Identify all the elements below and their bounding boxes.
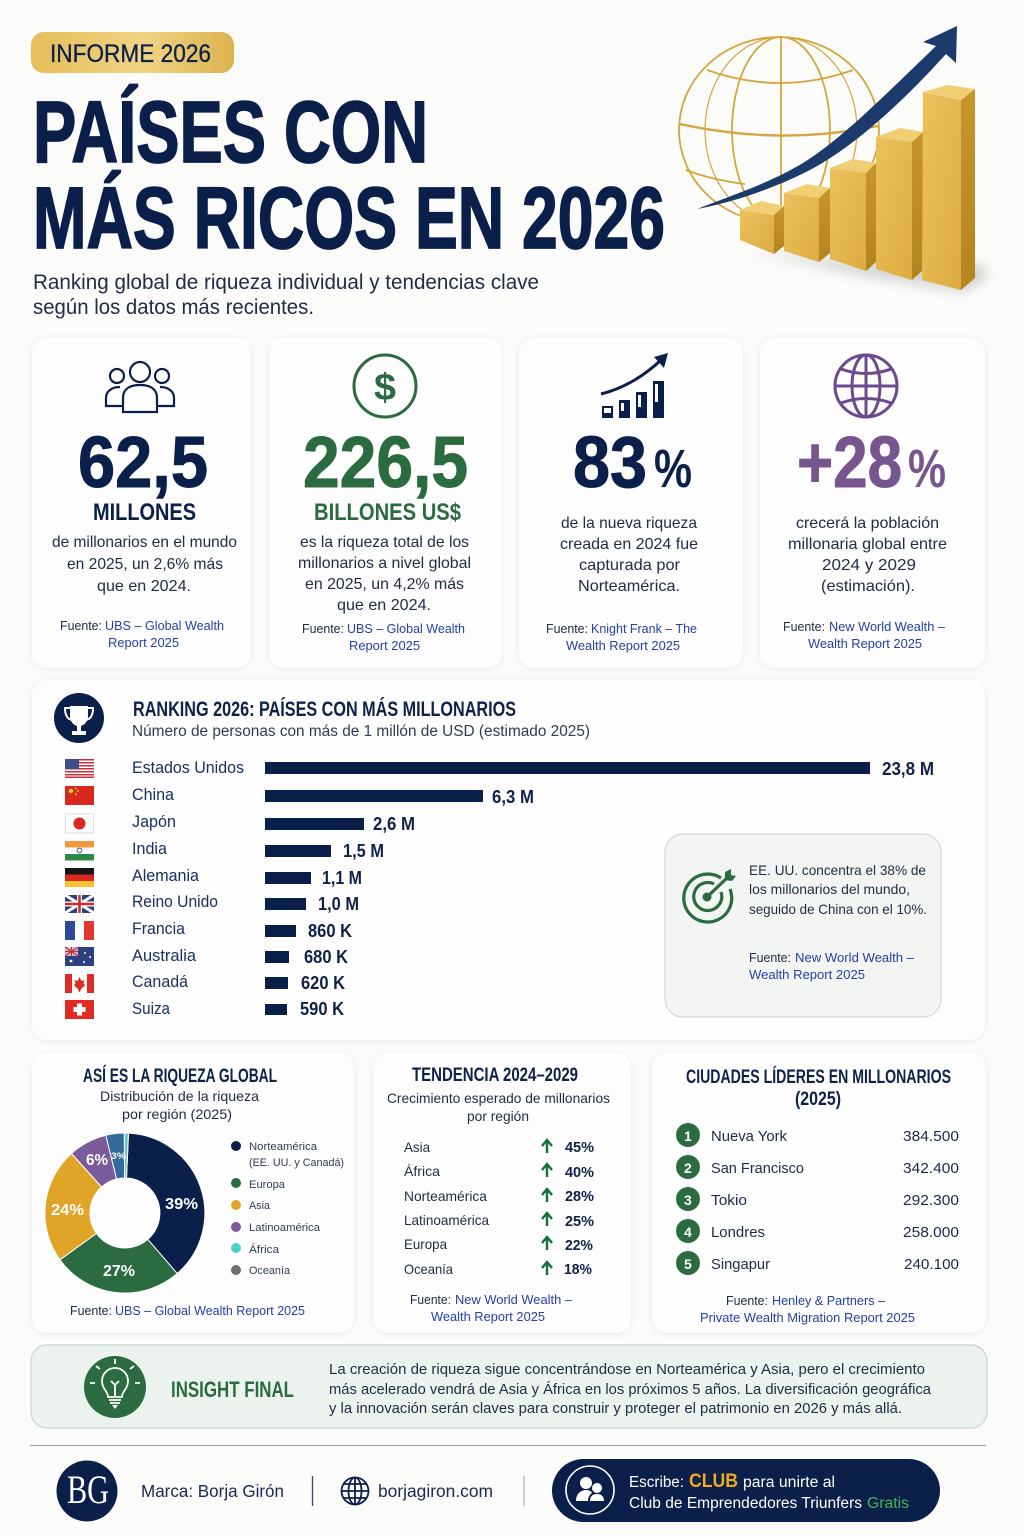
source: Fuente: <box>60 618 102 633</box>
heading: (2025) <box>795 1089 841 1110</box>
call to action text <box>629 1471 909 1512</box>
insight text: y la innovación serán claves para construir y proteger el patrimonio en 2026 y más allá. <box>329 1400 902 1417</box>
row: Alemania <box>65 867 362 888</box>
description: millonarios a nivel global <box>298 555 471 572</box>
city list: 342.400 <box>903 1160 959 1177</box>
donut chart <box>45 1133 205 1293</box>
legend: Asia <box>249 1200 271 1212</box>
growth list: 40% <box>565 1164 594 1181</box>
row: Reino Unido <box>65 893 359 914</box>
gold bars <box>740 85 975 290</box>
callout text: EE. UU. concentra el 38% de <box>749 862 926 878</box>
stat value: % <box>654 439 692 499</box>
heading: TENDENCIA 2024–2029 <box>412 1065 578 1086</box>
city list: Nueva York <box>711 1128 787 1145</box>
description: de millonarios en el mundo <box>52 534 237 551</box>
growth list: Latinoamérica <box>404 1212 489 1228</box>
row: Suiza: 590 K <box>300 999 344 1019</box>
panel: stat card +28% <box>760 338 985 668</box>
subtitle: Ranking global de riqueza individual y tendencias clave <box>33 271 539 294</box>
call to action text: Gratis <box>867 1495 909 1512</box>
row: Australia: 680 K <box>304 947 348 967</box>
description: capturada por <box>579 557 681 574</box>
source: Fuente: <box>410 1292 451 1307</box>
footer: brand logo: BG <box>67 1467 109 1512</box>
subheading: Crecimiento esperado de millonarios <box>387 1090 610 1106</box>
stat value <box>573 423 692 503</box>
row: Estados Unidos: 23,8 M <box>882 759 934 779</box>
description: (estimación). <box>821 578 915 595</box>
growth list: 22% <box>565 1237 593 1254</box>
row: China <box>65 786 534 807</box>
city list: 292.300 <box>903 1192 959 1209</box>
description: en 2025, un 4,2% más <box>305 576 464 593</box>
row: Japón: Japón <box>132 813 176 831</box>
city list: Singapur <box>711 1256 770 1273</box>
description: Norteamérica. <box>578 578 680 595</box>
growth list: 28% <box>565 1188 594 1205</box>
row: Francia: Francia <box>132 920 186 938</box>
city list: 240.100 <box>904 1256 959 1273</box>
source: New World Wealth – <box>795 950 915 965</box>
city list: 1 <box>684 1128 692 1144</box>
description: que en 2024. <box>337 597 431 614</box>
heading <box>686 1066 951 1110</box>
panel: ranking <box>32 680 985 1040</box>
city list: 3 <box>684 1192 692 1208</box>
growth list: 18% <box>564 1261 592 1278</box>
city list: 384.500 <box>903 1128 959 1145</box>
description: millonaria global entre <box>788 536 947 553</box>
description: que en 2024. <box>97 578 191 595</box>
icon: light bulb <box>84 1356 146 1418</box>
row: Canadá: 620 K <box>301 973 345 993</box>
heading: ASÍ ES LA RIQUEZA GLOBAL <box>83 1065 277 1087</box>
badge: informe 2026 <box>31 32 234 73</box>
growth list: África <box>404 1163 440 1179</box>
title: MÁS RICOS EN 2026 <box>33 170 665 267</box>
illustration: golden globe, bars and arrow <box>679 26 990 292</box>
city list: 258.000 <box>903 1224 959 1241</box>
growth list: 25% <box>565 1213 594 1230</box>
call to action text: Club de Emprendedores Triunfers <box>629 1495 862 1512</box>
row: Canadá: Canadá <box>132 973 189 991</box>
title: PAÍSES CON <box>33 84 428 181</box>
city list: 5 <box>684 1256 692 1272</box>
call to action text: para unirte al <box>743 1474 835 1491</box>
shadow under bars <box>745 250 990 292</box>
description: crecerá la población <box>796 515 939 532</box>
row: India <box>65 840 384 861</box>
description: 2024 y 2029 <box>822 557 916 574</box>
row: Suiza: Suiza <box>132 1000 171 1018</box>
donut labels: 27% <box>103 1263 135 1280</box>
growth list: Europa <box>404 1236 447 1252</box>
city list: San Francisco <box>711 1160 804 1177</box>
source: UBS – Global Wealth Report 2025 <box>115 1303 305 1318</box>
legend: Norteamérica <box>249 1141 318 1153</box>
row: Francia: 860 K <box>308 921 352 941</box>
source <box>410 1292 573 1324</box>
legend <box>231 1141 344 1277</box>
legend: Europa <box>249 1179 286 1191</box>
subheading: por región <box>467 1108 529 1124</box>
icon: dollar coin <box>354 355 416 417</box>
panel: ciudades líderes <box>652 1053 986 1333</box>
source: Report 2025 <box>108 635 179 650</box>
badge: informe 2026: INFORME 2026 <box>50 40 211 68</box>
row: Estados Unidos: Estados Unidos <box>132 759 244 777</box>
insight label: INSIGHT FINAL <box>171 1377 294 1402</box>
source <box>60 618 224 650</box>
row: Japón: 2,6 M <box>373 814 415 834</box>
source: New World Wealth – <box>829 619 946 634</box>
row: India: India <box>132 840 168 858</box>
insight text <box>329 1361 932 1417</box>
panel: stat card 83% <box>519 338 743 668</box>
description: en 2025, un 2,6% más <box>67 556 223 573</box>
stat value: 226,5 <box>303 423 468 503</box>
icon: growth chart <box>601 353 668 418</box>
source: Fuente: <box>783 619 825 634</box>
description <box>560 515 698 595</box>
source: UBS – Global Wealth <box>347 621 465 636</box>
panel: distribución de la riqueza <box>32 1053 354 1333</box>
panel: stat card millones <box>32 338 251 668</box>
source: Fuente: <box>749 950 791 965</box>
description <box>788 515 947 595</box>
subheading: por región (2025) <box>122 1106 232 1122</box>
source: Fuente: <box>302 621 344 636</box>
row: Reino Unido: 1,0 M <box>318 894 359 914</box>
ranking heading: RANKING 2026: PAÍSES CON MÁS MILLONARIOS <box>133 698 516 721</box>
icon: web globe <box>342 1478 368 1504</box>
source: UBS – Global Wealth <box>105 618 224 633</box>
growth list: Norteamérica <box>404 1188 487 1204</box>
subheading: Distribución de la riqueza <box>100 1088 259 1104</box>
source: Knight Frank – The <box>591 621 697 636</box>
row: Japón <box>66 813 415 834</box>
insight text: La creación de riqueza sigue concentrándose en Norteamérica y Asia, pero el crecimiento <box>329 1361 925 1378</box>
description: es la riqueza total de los <box>300 534 469 551</box>
legend: Oceanía <box>249 1265 291 1277</box>
description <box>52 534 237 595</box>
source: Private Wealth Migration Report 2025 <box>700 1310 915 1325</box>
city list: 4 <box>684 1224 692 1240</box>
source <box>783 619 946 651</box>
source <box>302 621 465 653</box>
stat unit: BILLONES US$ <box>314 499 462 526</box>
row: Australia: Australia <box>132 947 197 965</box>
subtitle: según los datos más recientes. <box>33 296 314 319</box>
call to action text: Escribe: <box>629 1474 684 1491</box>
legend: (EE. UU. y Canadá) <box>249 1157 344 1169</box>
callout text: seguido de China con el 10%. <box>749 901 927 917</box>
growth list: 45% <box>565 1139 594 1156</box>
footer: brand logo <box>56 1460 118 1522</box>
title <box>33 84 665 267</box>
subheading <box>387 1090 610 1124</box>
row: Suiza <box>65 999 344 1019</box>
panel: insight final <box>31 1345 987 1428</box>
source: Wealth Report 2025 <box>808 636 922 651</box>
icon: dollar coin: $ <box>374 367 396 409</box>
city list: 2 <box>684 1160 692 1176</box>
source: Fuente: <box>70 1303 112 1318</box>
row: China: 6,3 M <box>492 787 534 807</box>
city list <box>676 1123 959 1275</box>
stat value: +28 <box>797 423 902 503</box>
source <box>546 621 697 653</box>
source <box>700 1293 915 1325</box>
arrow <box>697 26 957 209</box>
donut labels: 24% <box>51 1202 84 1219</box>
row: Australia <box>65 947 348 967</box>
ranking subheading: Número de personas con más de 1 millón de USD (estimado 2025) <box>132 723 590 740</box>
source: Wealth Report 2025 <box>566 638 680 653</box>
icon: people <box>106 362 174 412</box>
insight text: más acelerado vendrá de Asia y África en los próximos 5 años. La diversificación geográfica <box>329 1381 932 1398</box>
footer: website: borjagiron.com <box>378 1481 493 1501</box>
source: Wealth Report 2025 <box>431 1309 545 1324</box>
legend: Latinoamérica <box>249 1222 321 1234</box>
city list: Londres <box>711 1224 765 1241</box>
row: India: 1,5 M <box>343 841 384 861</box>
source <box>749 950 915 982</box>
source: Henley & Partners – <box>772 1293 886 1308</box>
row: Francia <box>65 920 352 941</box>
source: Fuente: <box>726 1293 768 1308</box>
growth list: Oceanía <box>404 1261 453 1277</box>
icon: wireframe globe <box>679 37 879 223</box>
panel: tendencia 2024–2029 <box>373 1053 631 1333</box>
source: New World Wealth – <box>455 1292 573 1307</box>
icon: purple globe <box>835 355 897 417</box>
stat value: 62,5 <box>78 423 208 503</box>
call to action text: CLUB <box>689 1471 738 1492</box>
row: Canadá <box>65 973 345 993</box>
description <box>298 534 471 614</box>
row: Reino Unido: Reino Unido <box>132 893 218 911</box>
donut labels: 39% <box>165 1196 198 1213</box>
callout text <box>749 862 927 917</box>
subtitle <box>33 271 539 319</box>
icon: trophy <box>54 693 104 743</box>
stat value: % <box>908 439 946 499</box>
icon: target <box>684 869 736 922</box>
description: creada en 2024 fue <box>560 536 698 553</box>
callout text: los millonarios del mundo, <box>749 881 910 897</box>
icon: community <box>566 1466 614 1514</box>
subheading <box>100 1088 259 1122</box>
row: China: China <box>132 786 175 804</box>
growth list <box>404 1139 594 1278</box>
footer: brand name: Marca: Borja Girón <box>141 1481 284 1501</box>
callout: concentración EE. UU. <box>665 834 941 1017</box>
row: Alemania: Alemania <box>132 867 200 885</box>
row: Estados Unidos <box>65 759 934 779</box>
donut labels <box>51 1151 198 1280</box>
source: Report 2025 <box>349 638 420 653</box>
source: Fuente: <box>546 621 588 636</box>
panel: stat card billones <box>269 338 502 668</box>
stat unit: MILLONES <box>93 499 196 526</box>
donut labels: 3% <box>111 1151 126 1161</box>
growth list: Asia <box>404 1139 430 1155</box>
donut labels: 6% <box>86 1152 108 1169</box>
description: de la nueva riqueza <box>561 515 697 532</box>
legend: África <box>249 1243 280 1256</box>
source: Wealth Report 2025 <box>749 967 865 982</box>
row: Alemania: 1,1 M <box>322 868 362 888</box>
footer: club call to action <box>552 1459 940 1522</box>
stat value: 83 <box>573 423 647 503</box>
city list: Tokio <box>711 1192 747 1209</box>
